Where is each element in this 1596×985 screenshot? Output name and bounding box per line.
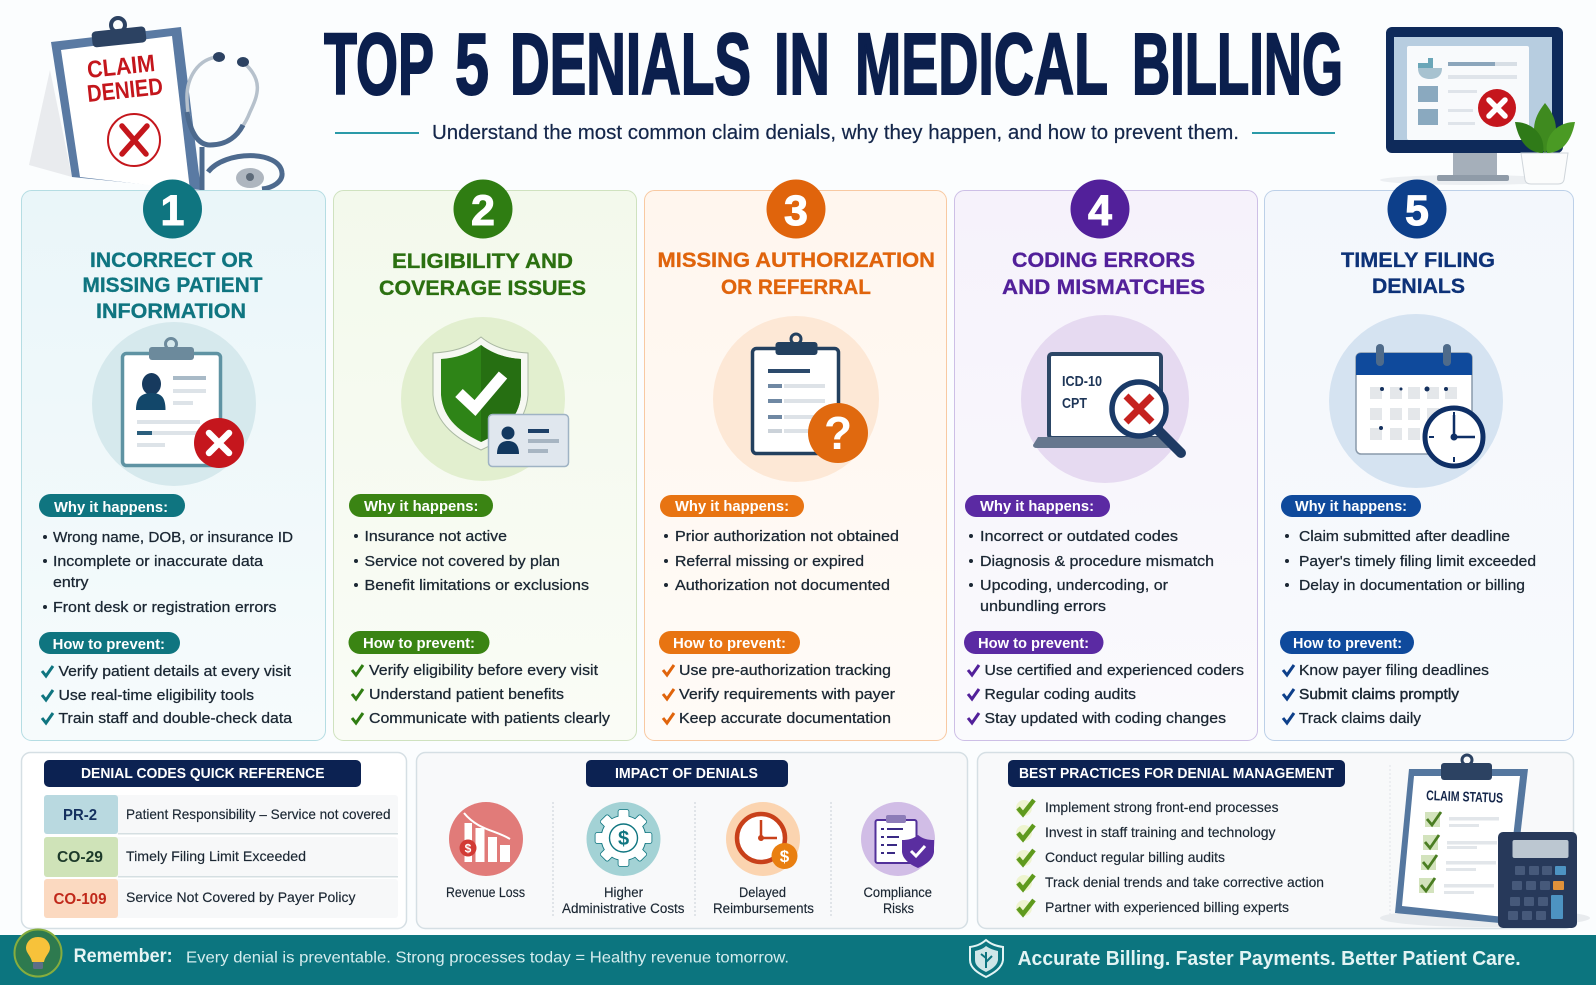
why it happens list: unbundling errors (980, 598, 1106, 615)
how to prevent label (964, 631, 1104, 654)
icon: shield (970, 940, 1003, 977)
code row pr-2: PR-2 (63, 807, 97, 824)
code row co-29 (44, 837, 398, 878)
heading: CODING ERRORS (1012, 249, 1195, 272)
how to prevent list: Verify patient details at every visit (58, 663, 292, 680)
card background (954, 190, 1258, 740)
remember message: Remember: (74, 945, 173, 967)
number badge 2: 2 (471, 187, 495, 235)
heading: OR REFERRAL (721, 276, 871, 299)
impact: compliance risks: Risks (883, 901, 914, 916)
title: BILLING (1132, 16, 1343, 113)
why it happens label: Why it happens: (364, 499, 478, 515)
icon: laptop with icd-10 cpt and magnifier (1021, 315, 1189, 483)
how to prevent list: Verify requirements with payer (679, 686, 895, 703)
why it happens list: Diagnosis & procedure mismatch (980, 553, 1214, 570)
heading: INFORMATION (96, 300, 246, 323)
illustration: claim status clipboard and calculator: CLAIM STATUS (1426, 787, 1503, 806)
how to prevent list: Communicate with patients clearly (369, 710, 611, 727)
best practices list: Track denial trends and take corrective action (1045, 874, 1324, 890)
title: TOP (324, 16, 434, 113)
why it happens list (969, 528, 1214, 615)
how to prevent label: How to prevent: (1293, 636, 1402, 652)
number badge 2 (454, 180, 512, 238)
heading: COVERAGE ISSUES (379, 277, 586, 300)
why it happens list: Claim submitted after deadline (1299, 528, 1510, 545)
how to prevent list (42, 663, 293, 727)
why it happens label (965, 495, 1110, 517)
number badge 1 (143, 180, 202, 238)
best practices list (1016, 799, 1324, 916)
heading: MISSING AUTHORIZATION (658, 249, 935, 272)
why it happens list (1285, 528, 1536, 594)
number badge 3 (766, 180, 826, 238)
title: MEDICAL (855, 16, 1108, 113)
how to prevent label (39, 632, 180, 654)
icon: green shield with id card (401, 317, 568, 481)
how to prevent list (968, 662, 1244, 727)
heading: AND MISMATCHES (1002, 276, 1205, 299)
why it happens list: Payer's timely filing limit exceeded (1299, 553, 1536, 570)
impact: compliance risks: Compliance (864, 885, 932, 900)
best practices list: Conduct regular billing audits (1045, 849, 1225, 865)
how to prevent list: Regular coding audits (984, 686, 1136, 703)
best practices list: Partner with experienced billing experts (1045, 899, 1289, 915)
heading: TIMELY FILING (1341, 249, 1495, 272)
panel background (978, 752, 1574, 928)
code row co-109: CO-109 (54, 891, 107, 908)
why it happens list: Delay in documentation or billing (1299, 577, 1525, 594)
why it happens label: Why it happens: (675, 499, 789, 515)
impact: compliance risks (861, 802, 935, 916)
title (324, 16, 1343, 113)
why it happens list: Authorization not documented (675, 577, 890, 594)
how to prevent list: Understand patient benefits (369, 686, 564, 703)
why it happens label: Why it happens: (1295, 499, 1407, 515)
panel heading: BEST PRACTICES FOR DENIAL MANAGEMENT (1019, 765, 1334, 782)
number badge 4: 4 (1088, 187, 1112, 235)
why it happens list: Front desk or registration errors (53, 599, 276, 616)
panel: denial 1 incorrect or missing patient information (22, 180, 326, 740)
how to prevent list: Use pre-authorization tracking (679, 662, 891, 679)
heading: INCORRECT OR (90, 249, 253, 272)
card background (334, 190, 636, 740)
panel: denial codes quick reference (22, 752, 406, 928)
how to prevent label (348, 631, 490, 654)
title: IN (774, 16, 830, 113)
panel: denial 4 coding errors and mismatches (954, 180, 1258, 740)
heading: ELIGIBILITY AND (392, 250, 573, 273)
how to prevent list: Know payer filing deadlines (1299, 662, 1489, 679)
number badge 5: 5 (1405, 187, 1429, 235)
illustration: claim denied clipboard and stethoscope: DENIED (86, 73, 164, 108)
code row pr-2: Patient Responsibility – Service not covered (126, 806, 390, 822)
code row pr-2 (44, 795, 398, 834)
panel heading (44, 760, 361, 787)
why it happens list: Referral missing or expired (675, 553, 864, 570)
impact: delayed reimbursements (713, 802, 814, 916)
why it happens label (349, 494, 493, 517)
why it happens label: Why it happens: (980, 499, 1094, 515)
code row co-109: Service Not Covered by Payer Policy (126, 889, 356, 905)
best practices list: Invest in staff training and technology (1045, 824, 1276, 840)
code row co-109 (44, 879, 398, 918)
panel heading (586, 760, 788, 787)
why it happens list: Incomplete or inaccurate data (53, 553, 264, 570)
how to prevent list: Verify eligibility before every visit (369, 662, 599, 679)
impact: delayed reimbursements: Reimbursements (713, 901, 814, 916)
card background (644, 190, 946, 740)
tagline: Accurate Billing. Faster Payments. Better Patient Care. (1018, 947, 1521, 970)
why it happens list (664, 528, 899, 594)
how to prevent label: How to prevent: (673, 636, 786, 652)
number badge 1: 1 (161, 187, 184, 235)
how to prevent list: Stay updated with coding changes (984, 710, 1226, 727)
panel heading: IMPACT OF DENIALS (615, 765, 758, 782)
illustration: monitor with denied record and plant (1380, 27, 1575, 185)
how to prevent label: How to prevent: (978, 636, 1089, 652)
title: 5 (455, 16, 489, 113)
best practices list: Implement strong front-end processes (1045, 799, 1278, 815)
panel: denial 5 timely filing denials (1264, 180, 1574, 740)
icon: calendar with clock (1329, 314, 1503, 488)
remember message: Every denial is preventable. Strong processes today = Healthy revenue tomorrow. (186, 950, 789, 967)
icon: patient record clipboard with red x (92, 322, 256, 486)
why it happens label (39, 494, 185, 517)
why it happens label: Why it happens: (54, 500, 168, 516)
panel: impact of denials (416, 752, 968, 928)
why it happens list (354, 528, 589, 594)
card background (22, 190, 326, 740)
number badge 3: 3 (784, 187, 808, 235)
impact: delayed reimbursements: Delayed (739, 885, 786, 900)
heading (658, 249, 935, 299)
number badge 4 (1070, 180, 1130, 238)
icon: clipboard with question mark (713, 316, 879, 482)
panel heading (1008, 760, 1345, 787)
why it happens list: entry (53, 574, 89, 591)
impact: revenue loss: $ (465, 842, 472, 856)
why it happens list: Incorrect or outdated codes (980, 528, 1178, 545)
how to prevent label: How to prevent: (363, 636, 475, 652)
why it happens label (1281, 495, 1421, 517)
how to prevent list: Track claims daily (1299, 710, 1422, 727)
how to prevent label (1280, 631, 1414, 654)
how to prevent list (352, 662, 611, 727)
footer banner (0, 930, 1596, 985)
impact: higher administrative costs (562, 802, 685, 916)
why it happens list: Upcoding, undercoding, or (980, 577, 1168, 594)
impact: revenue loss: Revenue Loss (446, 885, 525, 900)
code row co-29: Timely Filing Limit Exceeded (126, 848, 306, 864)
how to prevent list: Train staff and double-check data (58, 710, 293, 727)
heading (82, 249, 263, 323)
why it happens list: Wrong name, DOB, or insurance ID (53, 529, 293, 546)
heading (1002, 249, 1205, 299)
panel: best practices for denial management (978, 752, 1590, 928)
how to prevent list: Use real-time eligibility tools (58, 687, 254, 704)
impact: revenue loss (446, 802, 525, 900)
why it happens list: Benefit limitations or exclusions (364, 577, 589, 594)
icon: laptop with icd-10 cpt and magnifier: ICD-10 (1062, 373, 1102, 390)
heading (379, 250, 586, 300)
impact: higher administrative costs: $ (618, 828, 629, 850)
illustration: claim denied clipboard and stethoscope: CLAIM (86, 50, 156, 84)
illustration: claim denied clipboard and stethoscope (29, 18, 282, 190)
how to prevent label (659, 631, 800, 654)
panel: denial 3 missing authorization or referral (644, 180, 946, 740)
icon: clipboard with question mark: ? (824, 407, 852, 459)
why it happens list: Insurance not active (364, 528, 507, 545)
icon: laptop with icd-10 cpt and magnifier: CPT (1062, 395, 1087, 412)
number badge 5 (1388, 180, 1446, 238)
panel background (416, 752, 968, 928)
why it happens label (660, 495, 804, 517)
heading: MISSING PATIENT (82, 274, 263, 297)
impact: higher administrative costs: Administrative Costs (562, 901, 685, 916)
icon: lightbulb (14, 930, 62, 976)
heading: DENIALS (1372, 275, 1465, 298)
subtitle: Understand the most common claim denials, why they happen, and how to prevent them. (432, 122, 1239, 144)
why it happens list: Service not covered by plan (364, 553, 560, 570)
how to prevent list: Submit claims promptly (1299, 686, 1460, 703)
panel: denial 2 eligibility and coverage issues (334, 180, 636, 740)
code row co-29: CO-29 (57, 849, 103, 866)
title: DENIALS (510, 16, 751, 113)
impact: higher administrative costs: Higher (604, 885, 643, 900)
how to prevent list: Use certified and experienced coders (984, 662, 1244, 679)
remember message (74, 945, 789, 967)
why it happens list (43, 529, 293, 616)
illustration: claim status clipboard and calculator (1380, 755, 1590, 928)
why it happens list: Prior authorization not obtained (675, 528, 899, 545)
how to prevent list (1283, 662, 1489, 727)
how to prevent list (663, 662, 895, 727)
card background (1264, 190, 1574, 740)
impact: delayed reimbursements: $ (780, 847, 790, 866)
panel heading: DENIAL CODES QUICK REFERENCE (81, 765, 324, 782)
panel background (22, 752, 406, 928)
heading (1341, 249, 1495, 298)
how to prevent label: How to prevent: (53, 637, 165, 653)
how to prevent list: Keep accurate documentation (679, 710, 891, 727)
